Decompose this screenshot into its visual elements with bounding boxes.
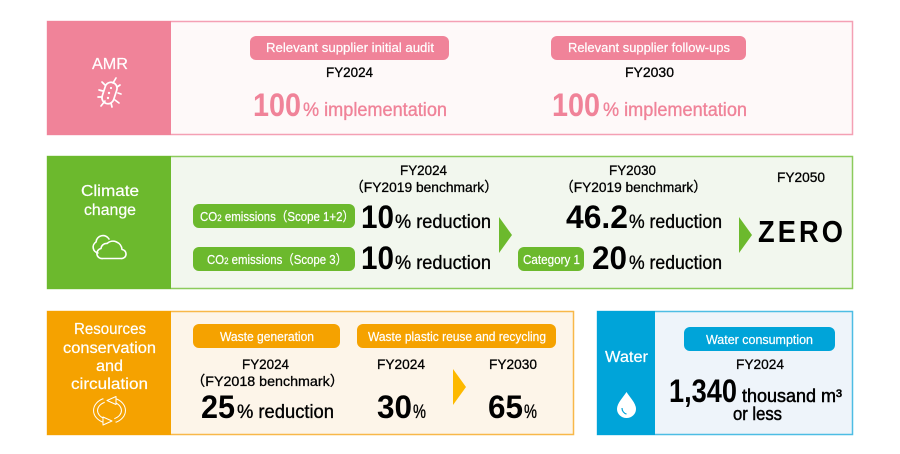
value: 100% implementation FY2030: 100 [552,87,600,123]
heading: Climate change: Climate [81,183,139,200]
pill: Scope 1+2 [193,204,355,228]
label: FY2030 benchmark: （FY2019 benchmark） [560,179,707,195]
heading: Resources conservation and circulation: and [96,358,123,375]
icon: bacterium [98,78,121,107]
label: FY2024 benchmark: （FY2019 benchmark） [350,179,498,195]
pill: Water consumption: Water consumption [706,332,813,347]
heading: Resources conservation and circulation: Resources [74,321,146,338]
value: 46.2% reduction [566,199,722,235]
label: FY2024: FY2024 [326,64,373,80]
value: 100% implementation FY2024 [253,87,447,123]
panel: Resources conservation and circulation [47,311,574,435]
heading: Resources conservation and circulation: conservation [63,340,156,357]
pill: initial audit [250,36,449,60]
arrow [739,217,752,253]
label: FY2024 benchmark: （FY2018 benchmark） [191,373,344,389]
label: FY2024 benchmark: FY2024 [400,162,447,178]
pill: initial audit: Relevant supplier initial audit [266,40,434,55]
heading: AMR: AMR [92,56,128,73]
pill: Waste generation [193,324,340,348]
value: 10% reduction scope 3: 10 [361,240,394,276]
pill: follow-ups [551,36,746,60]
label: FY2030 benchmark: FY2030 [609,162,656,178]
value: ZERO: ZERO [758,215,843,249]
label: FY2024: FY2024 [736,356,784,372]
value: 65%: 65 [488,389,523,425]
label: FY2050: FY2050 [777,169,825,185]
panel: Climate change [47,156,852,289]
label: FY2024 benchmark [350,162,498,195]
pill: Scope 3: CO2 emissions（Scope 3） [207,252,347,267]
value: 25% reduction: % reduction [237,402,334,423]
pill: Scope 3 [193,247,355,271]
value: 100% implementation FY2024: % implementation [303,100,447,121]
value: 100% implementation FY2030: % implementation [603,100,747,121]
label: FY2024 benchmark: FY2024 [242,356,289,372]
value: 20% reduction [592,240,722,276]
label: FY2024 benchmark [191,356,344,389]
pill: Category 1: Category 1 [523,252,580,267]
value: 10% reduction scope 3 [361,240,491,276]
heading: Water: Water [605,349,648,366]
pill: Scope 1+2: CO2 emissions（Scope 1+2） [200,209,354,224]
value: 25% reduction: 25 [201,389,235,425]
label: FY2024: FY2024 [377,356,425,372]
heading: Resources conservation and circulation: circulation [71,376,148,393]
pill: follow-ups: Relevant supplier follow-ups [568,40,730,55]
value: 65%: % [524,402,537,423]
pill: Waste plastic: Waste plastic reuse and recycling [368,329,546,344]
label: FY2030: FY2030 [625,64,674,80]
value: 10% reduction [361,199,491,235]
value: 30%: % [413,402,426,423]
value: 46.2% reduction: % reduction [629,212,722,233]
heading: Resources conservation and circulation [63,321,156,393]
panel: Water [597,311,852,435]
label: FY2030 benchmark [560,162,707,195]
pill: Waste plastic [357,324,556,348]
value: 100% implementation FY2024: 100 [253,87,301,123]
arrow [499,217,512,253]
pill: Waste generation: Waste generation [220,329,314,344]
value: 10% reduction: % reduction [395,212,491,233]
value: 1,340 thousand m3 or less: thousand m³ [742,386,842,406]
heading: Climate change: change [84,202,136,219]
icon: cloud [93,236,126,259]
value: 1,340 thousand m3 or less [669,373,842,424]
value: 1,340 thousand m3 or less: 1,340 [669,373,737,409]
label: FY2030: FY2030 [489,356,537,372]
icon: water drop [617,392,636,418]
value: 20% reduction: % reduction [629,253,722,274]
value: 20% reduction: 20 [592,240,627,276]
value: 46.2% reduction: 46.2 [566,199,628,235]
icon: circular arrows [96,396,123,425]
value: 30%: 30 [377,389,412,425]
pill: Water consumption [684,327,835,351]
panel: AMR [47,21,852,135]
value: 1,340 thousand m3 or less: or less [733,404,782,424]
value: 10% reduction: 10 [361,199,394,235]
pill: Category 1 [518,247,584,271]
value: 10% reduction scope 3: % reduction [395,253,491,274]
value: 25% reduction [201,389,334,425]
heading: Climate change [81,183,139,219]
arrow [453,369,466,405]
value: 100% implementation FY2030 [552,87,747,123]
